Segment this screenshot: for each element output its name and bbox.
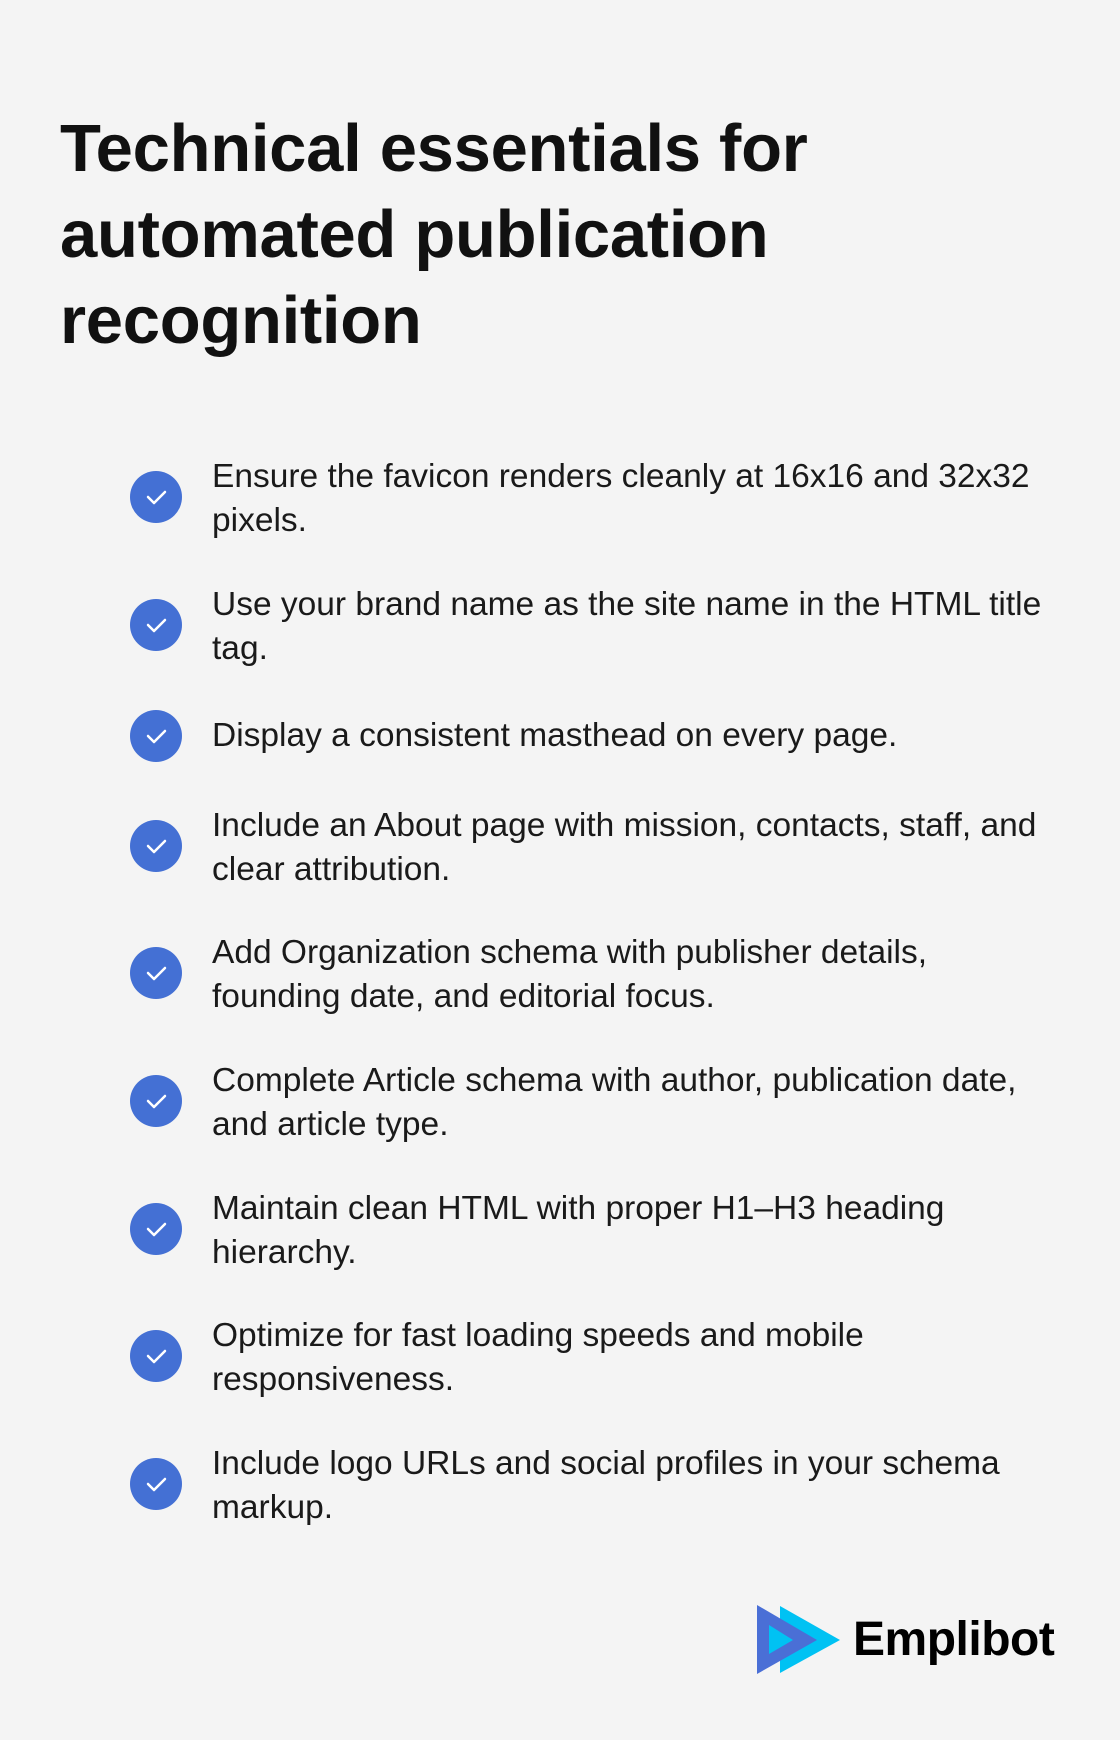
item 4: Include an About page with mission, contacts, staff, and clear attribution. [212, 807, 1036, 888]
item 9: Include logo URLs and social profiles in your schema markup. [212, 1445, 1000, 1526]
item 3: Display a consistent masthead on every page. [212, 717, 897, 754]
logo [757, 1605, 1054, 1674]
item 8: Optimize for fast loading speeds and mobile responsiveness. [212, 1317, 864, 1398]
icon: logo triangles [757, 1605, 840, 1674]
item 5: Add Organization schema with publisher details, founding date, and editorial focus. [212, 934, 927, 1015]
item 2: Use your brand name as the site name in the HTML title tag. [212, 586, 1041, 667]
item 1: Ensure the favicon renders cleanly at 16x16 and 32x32 pixels. [212, 458, 1030, 539]
item 7: Maintain clean HTML with proper H1–H3 heading hierarchy. [212, 1190, 944, 1271]
title: Technical essentials for automated publication recognition [60, 111, 807, 358]
item 3 [130, 710, 897, 762]
item 6: Complete Article schema with author, publication date, and article type. [212, 1062, 1016, 1143]
logo text: Emplibot [853, 1613, 1054, 1666]
